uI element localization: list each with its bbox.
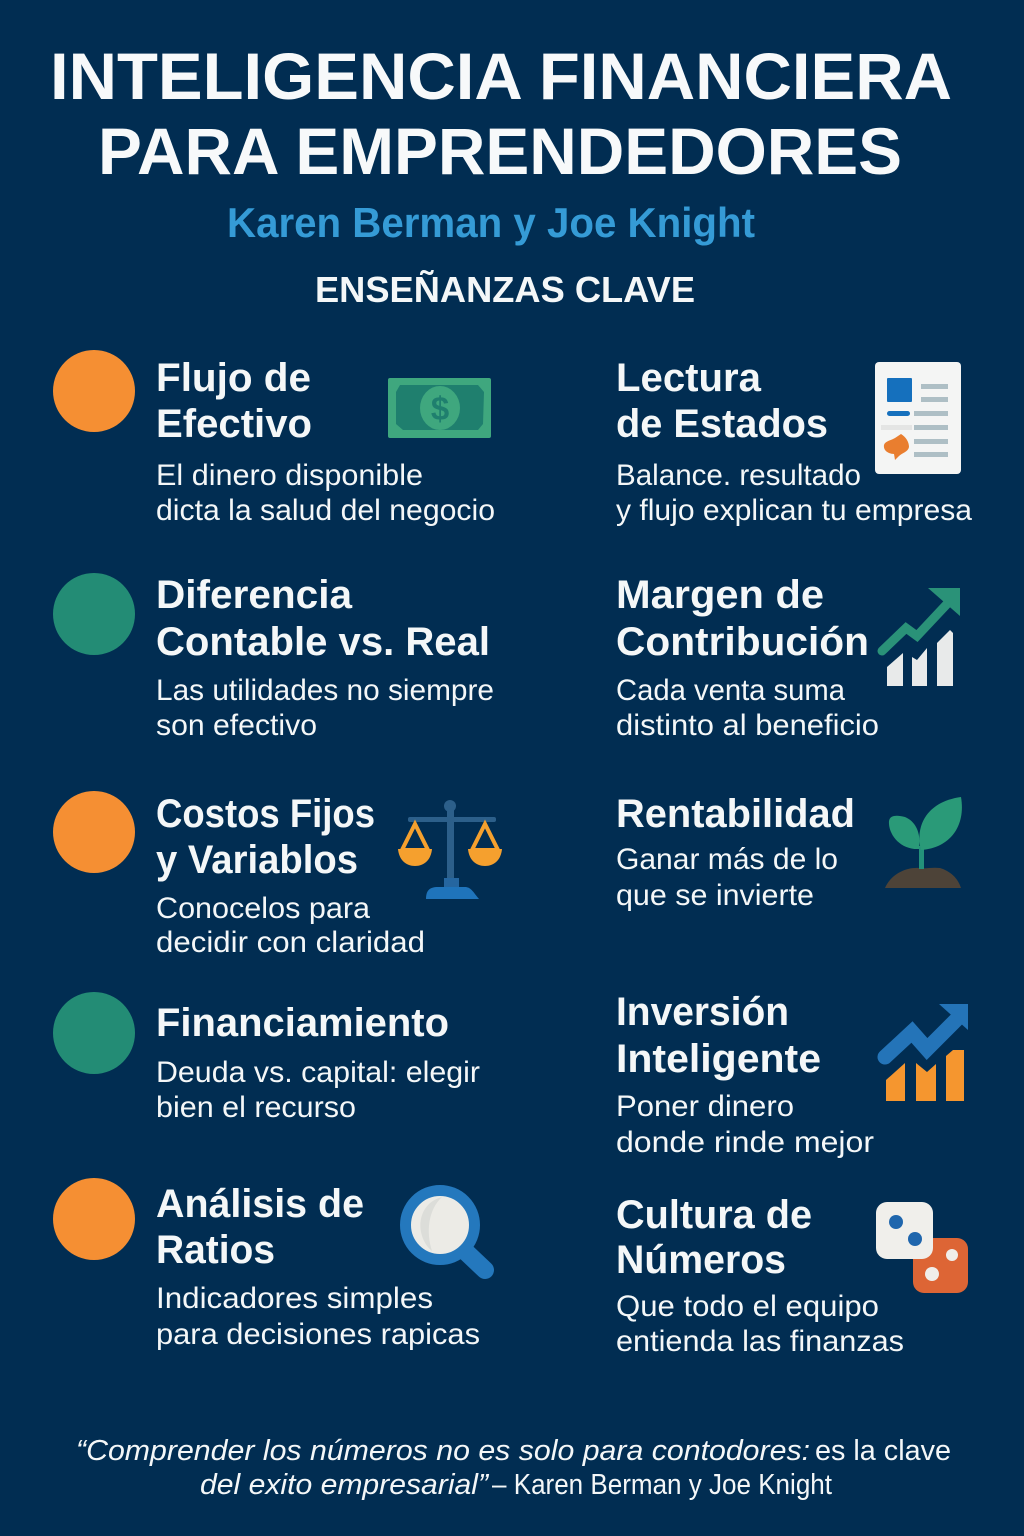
description: entienda las finanzas [616, 1325, 904, 1358]
heading: Lectura [616, 356, 762, 400]
description [156, 459, 495, 527]
description: dicta la salud del negocio [156, 494, 495, 527]
heading [156, 356, 312, 446]
orange bullet [53, 791, 135, 873]
description: Ganar más de lo [616, 843, 838, 876]
description: distinto al beneficio [616, 709, 879, 742]
quote: “Comprender los números no es solo para contodores: [76, 1435, 810, 1467]
description [156, 1282, 480, 1351]
description [616, 674, 879, 742]
description: y flujo explican tu empresa [616, 494, 972, 527]
description [156, 1056, 480, 1124]
description [616, 1290, 904, 1358]
icon: dice [876, 1202, 968, 1293]
heading: Rentabilidad [616, 792, 855, 836]
title: PARA EMPRENDEDORES [98, 114, 902, 188]
description [616, 1090, 874, 1159]
heading [156, 1182, 364, 1272]
green bullet [53, 992, 135, 1074]
icon: sprout [885, 797, 962, 888]
panel: Flujo de Efectivo [53, 350, 495, 527]
section heading: ENSEÑANZAS CLAVE [315, 268, 695, 310]
heading [616, 990, 821, 1081]
icon: growth chart green [882, 588, 960, 686]
panel: Financiamiento [53, 992, 480, 1124]
heading: Cultura de [616, 1193, 812, 1237]
panel: Rentabilidad [616, 792, 962, 912]
heading: Efectivo [156, 402, 312, 446]
description: Que todo el equipo [616, 1290, 879, 1323]
heading: Números [616, 1238, 786, 1282]
quote: es la clave [815, 1435, 951, 1467]
heading: Contable vs. Real [156, 620, 490, 664]
description: Balance. resultado [616, 459, 861, 492]
description: Cada venta suma [616, 674, 845, 707]
icon: banknote [388, 378, 491, 438]
heading: Financiamiento [156, 1001, 449, 1045]
icon: financial statement document [875, 362, 961, 474]
heading [616, 1193, 812, 1282]
panel: Lectura de Estados [616, 356, 972, 527]
description [156, 674, 494, 742]
heading: de Estados [616, 402, 828, 446]
description: Indicadores simples [156, 1282, 433, 1315]
description: Las utilidades no siempre [156, 674, 494, 707]
heading: Flujo de [156, 356, 311, 400]
description: El dinero disponible [156, 459, 423, 492]
quote [76, 1435, 951, 1501]
heading: Margen de [616, 573, 824, 617]
panel: Costos Fijos y Variablos [53, 791, 502, 959]
heading [156, 573, 490, 664]
heading: Inteligente [616, 1037, 821, 1081]
panel: Margen de Contribución [616, 573, 960, 742]
panel: Inversión Inteligente [616, 990, 968, 1159]
description: bien el recurso [156, 1091, 356, 1124]
description: Deuda vs. capital: elegir [156, 1056, 480, 1089]
panel: Análisis de Ratios [53, 1178, 485, 1351]
description: Poner dinero [616, 1090, 794, 1123]
description [616, 843, 838, 912]
heading [156, 792, 375, 882]
heading: Diferencia [156, 573, 353, 617]
icon: growth chart blue and orange [885, 1004, 968, 1101]
orange bullet [53, 1178, 135, 1260]
title: INTELIGENCIA FINANCIERA [50, 39, 952, 113]
heading: Análisis de [156, 1182, 364, 1226]
heading: Contribución [616, 620, 869, 664]
panel: Cultura de Números [616, 1193, 968, 1358]
heading [616, 573, 869, 664]
heading: Ratios [156, 1228, 275, 1272]
quote: – Karen Berman y Joe Knight [492, 1469, 832, 1501]
panel: Diferencia Contable vs. Real [53, 573, 494, 742]
green bullet [53, 573, 135, 655]
icon: balance scale [398, 800, 502, 899]
description: para decisiones rapicas [156, 1318, 480, 1351]
subtitle: authors: Karen Berman y Joe Knight [227, 199, 755, 246]
heading [616, 356, 828, 446]
quote: del exito empresarial” [200, 1469, 489, 1501]
description: que se invierte [616, 879, 814, 912]
description [156, 892, 425, 959]
description: son efectivo [156, 709, 317, 742]
description: Conocelos para [156, 892, 370, 925]
heading: Inversión [616, 990, 789, 1034]
description: decidir con claridad [156, 926, 425, 959]
icon: banknote: $ [431, 390, 449, 427]
description [616, 459, 972, 527]
description: donde rinde mejor [616, 1126, 874, 1159]
heading: Costos Fijos [156, 792, 375, 836]
title [50, 39, 952, 188]
icon: magnifying glass [406, 1190, 485, 1270]
orange bullet [53, 350, 135, 432]
heading: y Variablos [156, 838, 358, 882]
